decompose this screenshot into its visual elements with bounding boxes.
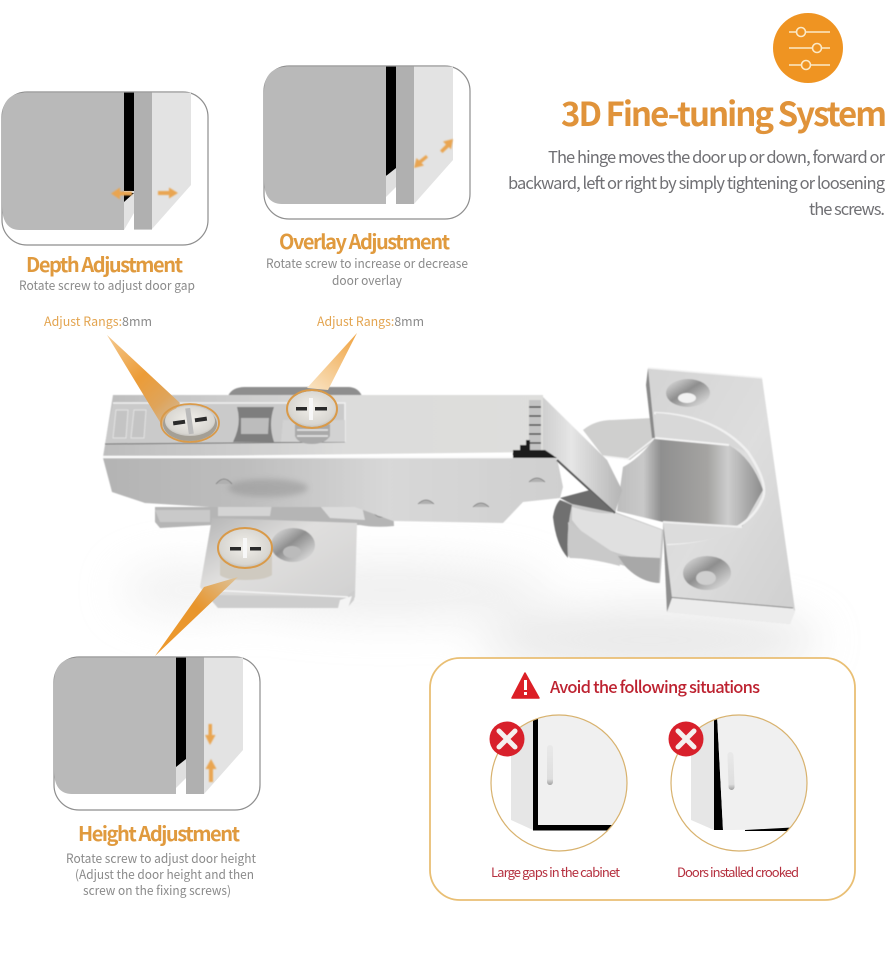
label: depth range: Adjust Rangs:8mm: [44, 311, 152, 330]
body top face: [103, 395, 543, 457]
vents: [113, 410, 146, 438]
text: intro paragraph: the screws.: [809, 196, 885, 220]
text: overlay description: Rotate screw to increase or decrease: [266, 253, 468, 272]
panel: avoid situations: [430, 658, 855, 900]
orange ray: height screw: [155, 577, 238, 656]
text: height description: Rotate screw to adjust door height: [66, 848, 256, 867]
screw: depth: [161, 404, 219, 442]
cup bottom lip: [667, 597, 795, 624]
body side: [103, 458, 563, 523]
text: intro paragraph: The hinge moves the door up or down, forward or: [548, 144, 886, 168]
text: intro paragraph: backward, left or right by simply tightening or loosening: [508, 170, 886, 194]
title: 3D Fine-tuning System: [561, 88, 887, 136]
panel: height adjustment: [54, 657, 260, 810]
text: height description: (Adjust the door height and then: [75, 864, 254, 883]
orange ray: depth screw: [107, 335, 180, 427]
screw: height: [218, 528, 272, 568]
cup rear disc: [583, 418, 656, 460]
heading: depth adjustment: Depth Adjustment: [26, 249, 184, 278]
icon: red x: [668, 722, 704, 756]
hinge arm: [530, 397, 622, 513]
icon: red x: [490, 722, 524, 756]
illustration: large gaps: [491, 715, 628, 851]
icon: sliders badge: [773, 13, 843, 83]
panel: depth adjustment: [2, 92, 208, 245]
screw: overlay: [287, 390, 337, 428]
label: overlay range: Adjust Rangs:8mm: [317, 311, 424, 330]
icon: diagonal arrows: [414, 139, 453, 168]
text: intro paragraph: [508, 144, 886, 220]
caption: crooked: Doors installed crooked: [677, 862, 799, 881]
floor shadow: [120, 562, 820, 672]
text: height description: [66, 848, 256, 899]
knuckle: [513, 400, 557, 458]
panel: overlay adjustment: [264, 66, 470, 219]
slot: [233, 407, 274, 442]
text: height description: screw on the fixing screws): [83, 880, 231, 899]
text: overlay description: [266, 253, 468, 289]
illustration: crooked door: [671, 715, 808, 851]
cup screw holes: [666, 379, 710, 407]
heading: height adjustment: Height Adjustment: [78, 818, 241, 847]
screw 3 post: [220, 555, 272, 580]
rear tab: [228, 387, 362, 396]
lower cup body: [553, 500, 664, 583]
icon: vertical arrows: [205, 724, 216, 782]
screw 2 thread: [295, 424, 330, 444]
caption: large gaps: Large gaps in the cabinet: [491, 862, 620, 881]
bracket rails: [155, 503, 394, 528]
icon: arrows left and right: [111, 188, 178, 200]
cup plate: [648, 368, 795, 624]
mounting plate: [200, 518, 357, 608]
orange ray: overlay screw: [307, 333, 357, 390]
text: overlay description: door overlay: [332, 270, 402, 289]
heading: overlay adjustment: Overlay Adjustment: [279, 226, 451, 255]
cup opening: [617, 438, 763, 527]
text: depth description: Rotate screw to adjust door gap: [19, 275, 195, 294]
icon: warning triangle: [512, 673, 539, 698]
hinge illustration: [103, 368, 795, 624]
heading: avoid: Avoid the following situations: [550, 674, 760, 698]
